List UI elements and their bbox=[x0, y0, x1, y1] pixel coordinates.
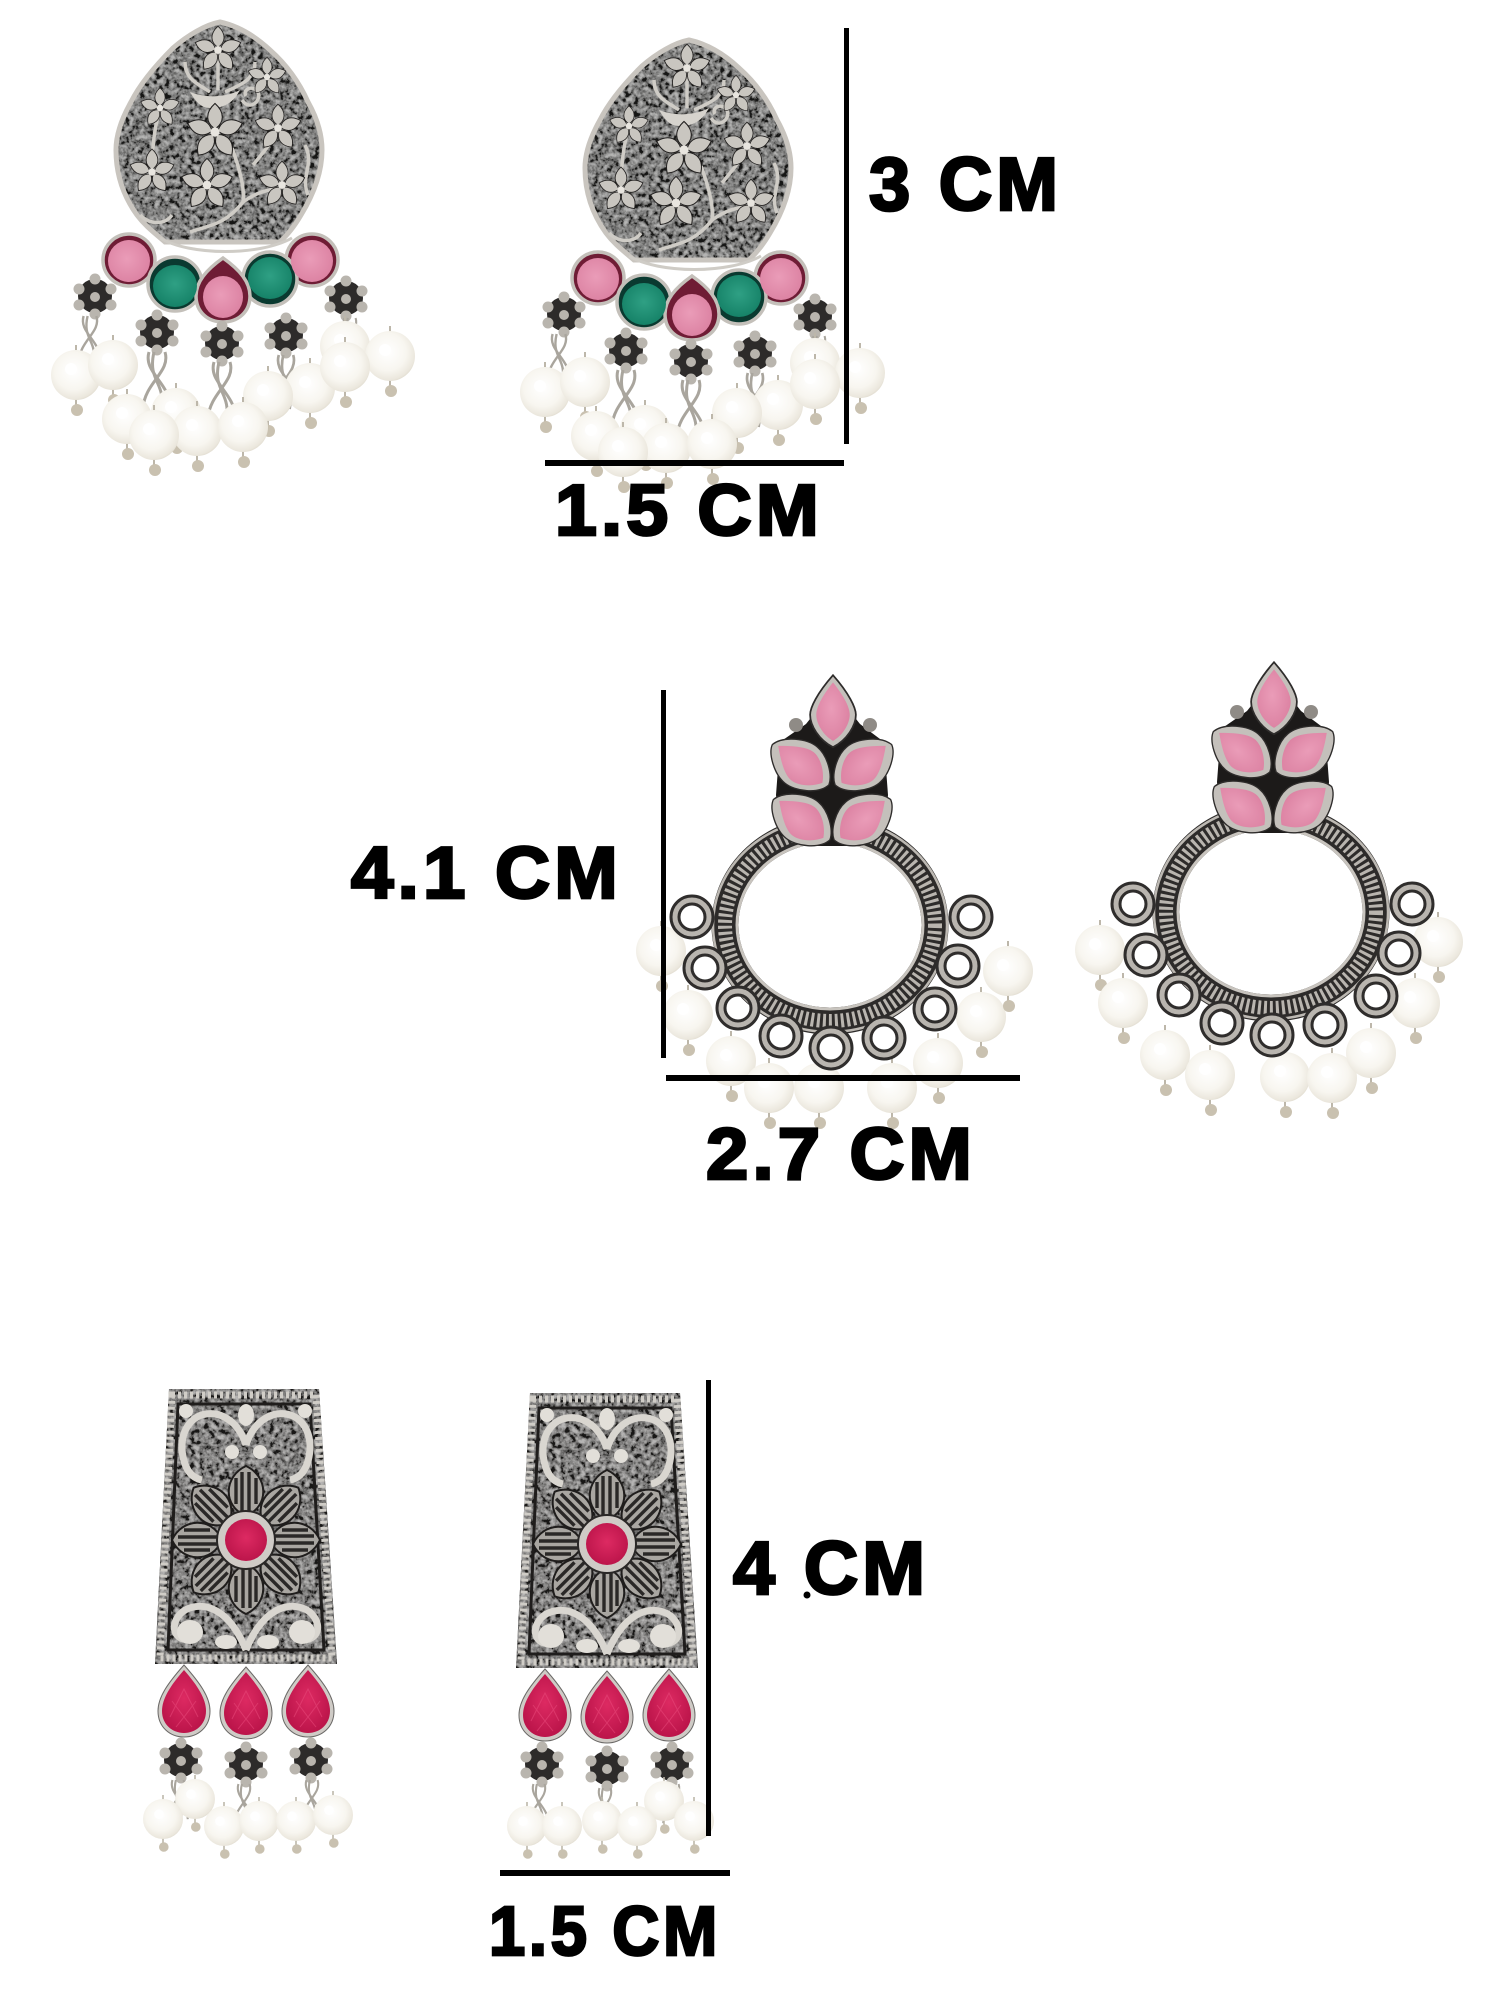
earring pair 2: right chandbali earring bbox=[1075, 662, 1463, 1119]
label: 1.5 CM, lower: 1.5 CM bbox=[489, 1892, 721, 1970]
dimension line: 3 CM height bbox=[844, 28, 849, 444]
dimension line: 4 CM height bbox=[706, 1380, 711, 1836]
label: 2.7 CM: 2.7 CM bbox=[706, 1114, 976, 1195]
label: 1.5 CM: 1.5 CM bbox=[555, 471, 823, 551]
earring pair 3: right pendant earring bbox=[507, 1389, 714, 1859]
dimension line: 1.5 CM width, lower bbox=[500, 1870, 730, 1876]
speck beside 4 CM bbox=[804, 1592, 810, 1598]
dimension line: 2.7 CM width bbox=[666, 1075, 1020, 1081]
earring pair 3: left pendant earring bbox=[143, 1385, 353, 1859]
dimension line: 4.1 CM height bbox=[661, 690, 666, 1058]
label: 4 CM: 4 CM bbox=[733, 1526, 929, 1610]
pearls bbox=[507, 1777, 714, 1859]
earring pair 1: right teardrop earring bbox=[520, 28, 885, 493]
earring pair 2: left chandbali earring bbox=[636, 675, 1033, 1129]
pearls bbox=[520, 333, 885, 493]
pearls bbox=[636, 921, 1033, 1129]
label: 4.1 CM: 4.1 CM bbox=[351, 833, 622, 914]
earring pair 1: left teardrop earring bbox=[51, 10, 415, 476]
dimension line: 1.5 CM width bbox=[545, 460, 844, 466]
pearls bbox=[1075, 912, 1463, 1119]
pearls bbox=[51, 316, 415, 476]
label: 3 CM: 3 CM bbox=[869, 142, 1062, 226]
pearls bbox=[143, 1775, 353, 1859]
